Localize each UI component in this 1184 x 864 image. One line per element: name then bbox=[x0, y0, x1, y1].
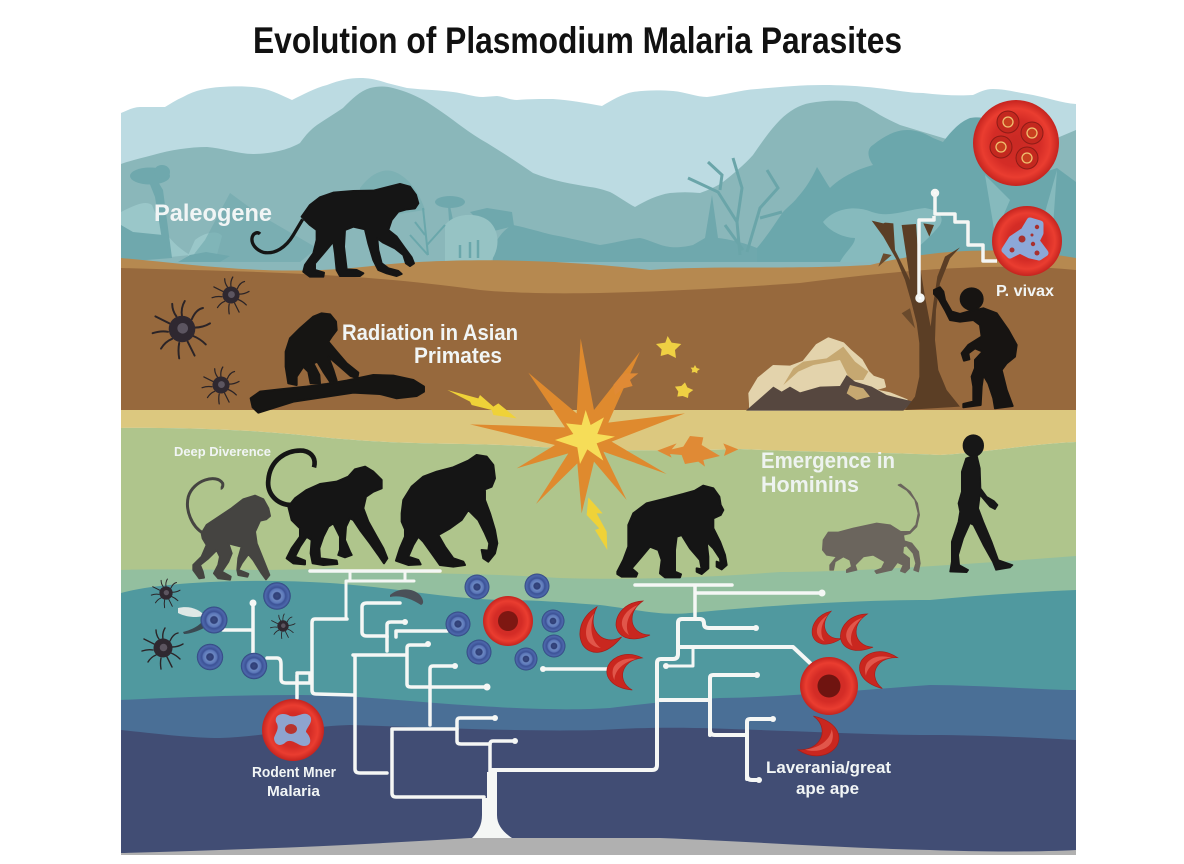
left bare plants bbox=[410, 208, 445, 255]
label: Laverania/great ape ape: Laverania/great bbox=[766, 759, 892, 777]
red crescent cells bbox=[570, 601, 903, 767]
silhouette: ape right of burst bbox=[617, 486, 727, 577]
right red cell bbox=[800, 657, 858, 715]
bare tree bbox=[872, 221, 960, 410]
silhouette: bent hominin at tree bbox=[934, 287, 1017, 408]
pale green layer bbox=[121, 556, 1076, 620]
label: Rodent Malaria: Malaria bbox=[267, 784, 321, 800]
rock pile bbox=[746, 338, 913, 411]
teal layer bbox=[121, 581, 1076, 720]
phylogenetic tree left clade bbox=[223, 571, 608, 800]
label: Radiation in Asian Primates: Radiation in Asian bbox=[342, 320, 518, 345]
label: Rodent Malaria: Rodent Mner bbox=[252, 765, 336, 781]
pale hill behind monkey bbox=[360, 171, 425, 220]
label: Emergence in Hominins: Hominins bbox=[761, 472, 859, 497]
silhouette: grey quadruped bbox=[823, 484, 920, 573]
silhouette: monkey on branch bbox=[251, 313, 424, 413]
mosquito icon left bbox=[178, 607, 204, 634]
silhouette: black monkey with curled tail bbox=[268, 451, 387, 565]
explosion burst bbox=[447, 338, 685, 550]
silhouette: grey monkey bbox=[187, 479, 270, 580]
silhouette: walking human bbox=[950, 435, 1013, 572]
left tree silhouettes bbox=[121, 165, 800, 262]
yellow stars bbox=[656, 336, 700, 398]
pale left forest bbox=[121, 203, 222, 262]
yellow sand layer bbox=[121, 410, 1076, 455]
title: Evolution of Plasmodium Malaria Parasites bbox=[253, 20, 902, 61]
parasite germs in soil bbox=[153, 277, 249, 404]
green layer bbox=[121, 428, 1076, 600]
blue layer bbox=[121, 685, 1076, 760]
label: Deep Diverence: Deep Diverence bbox=[174, 444, 271, 459]
navy layer bbox=[121, 725, 1076, 855]
silhouette: large ape bbox=[396, 455, 497, 567]
label: Laverania/great ape ape bbox=[766, 759, 892, 798]
label: Laverania/great ape ape: ape ape bbox=[796, 780, 859, 798]
label: Paleogene: Paleogene bbox=[154, 200, 272, 227]
infected red cell with four rings bbox=[973, 100, 1059, 186]
blue blood cells bbox=[197, 574, 566, 679]
pale tree clump bbox=[445, 215, 498, 262]
label: Rodent Malaria bbox=[252, 765, 336, 800]
silhouette: walking monkey bbox=[252, 184, 418, 277]
label: Radiation in Asian Primates bbox=[342, 320, 518, 368]
brown soil layer bbox=[121, 267, 1076, 415]
label: Emergence in Hominins bbox=[761, 448, 895, 497]
tree trunk and right clade bbox=[250, 585, 826, 838]
label: Emergence in Hominins: Emergence in bbox=[761, 448, 895, 473]
distant mountains bbox=[121, 86, 1076, 290]
jungle pale leaves bbox=[823, 208, 942, 262]
rodent malaria cell bbox=[262, 699, 324, 761]
label: P. vivax: P. vivax bbox=[996, 283, 1054, 300]
leech icon at tree tip bbox=[390, 589, 423, 605]
background landscape layers bbox=[121, 78, 1076, 855]
grey base bbox=[121, 838, 1076, 855]
central red cell bbox=[483, 596, 533, 646]
orange flakes bbox=[613, 373, 738, 467]
label: Radiation in Asian Primates: Primates bbox=[414, 343, 502, 368]
infected red cell with blue parasite bbox=[992, 206, 1062, 276]
right bare tree bbox=[688, 158, 782, 255]
parasite germs near water bbox=[142, 579, 295, 669]
lightning bolts bbox=[447, 390, 607, 550]
right jungle mass bbox=[757, 117, 1076, 262]
branch lines to P. vivax bbox=[917, 190, 997, 301]
brown light band bbox=[121, 251, 1076, 415]
